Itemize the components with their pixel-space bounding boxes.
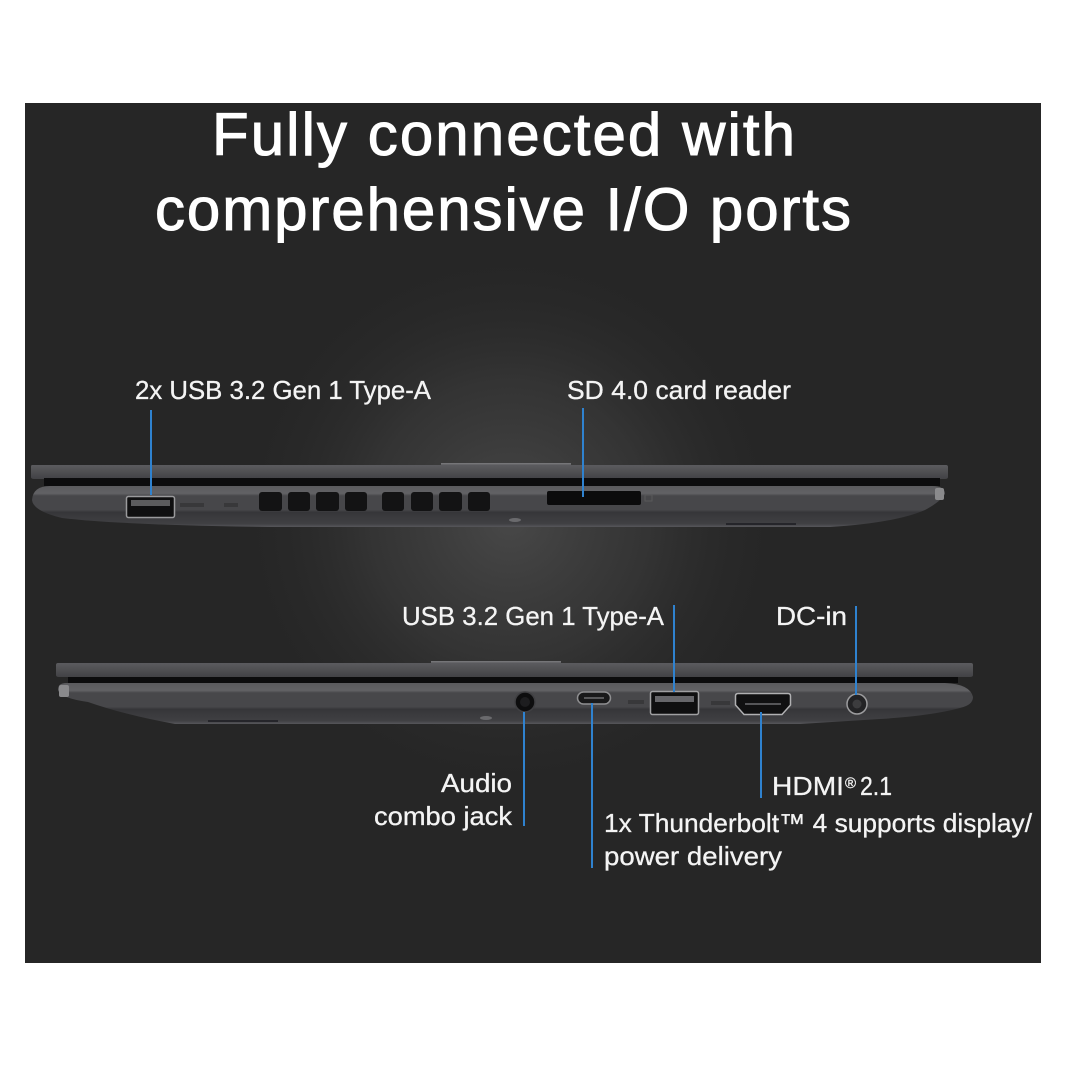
usb port: [628, 692, 698, 714]
laptop: left side view: [31, 463, 948, 527]
vents: [259, 492, 490, 511]
thunderbolt port: [578, 692, 610, 704]
title: comprehensive I/O ports: [155, 176, 851, 243]
label: audio combo jack: combo jack: [374, 801, 513, 831]
label: thunderbolt: 1x Thunderbolt™ 4 supports display/: [604, 808, 1033, 838]
label: thunderbolt: [604, 808, 1033, 871]
label: sd reader: SD 4.0 card reader: [567, 375, 791, 405]
lid: [31, 463, 948, 479]
label: audio combo jack: [374, 768, 513, 831]
label: dc-in: DC-in: [776, 601, 847, 631]
audio jack: [515, 692, 535, 712]
title: [155, 101, 851, 243]
sd card slot: [547, 491, 652, 505]
label: thunderbolt: power delivery: [604, 841, 782, 871]
lid: [56, 661, 973, 677]
usb port: [126, 496, 238, 518]
title: Fully connected with: [212, 101, 795, 168]
label: hdmi: HDMI: [772, 771, 844, 801]
label: hdmi: 2.1: [860, 771, 892, 801]
hdmi port: [711, 694, 790, 714]
label: hdmi: [772, 771, 892, 801]
laptop: right side view: [56, 661, 973, 724]
label: usb right: USB 3.2 Gen 1 Type-A: [402, 601, 665, 631]
leader lines: [151, 408, 856, 868]
label: audio combo jack: Audio: [441, 768, 512, 798]
label: usb left: 2x USB 3.2 Gen 1 Type-A: [135, 375, 432, 405]
panel: dark background: [25, 103, 1041, 963]
base: [58, 683, 973, 724]
label: hdmi: ®: [845, 775, 856, 792]
base: [32, 486, 945, 527]
dc-in port: [847, 694, 867, 714]
